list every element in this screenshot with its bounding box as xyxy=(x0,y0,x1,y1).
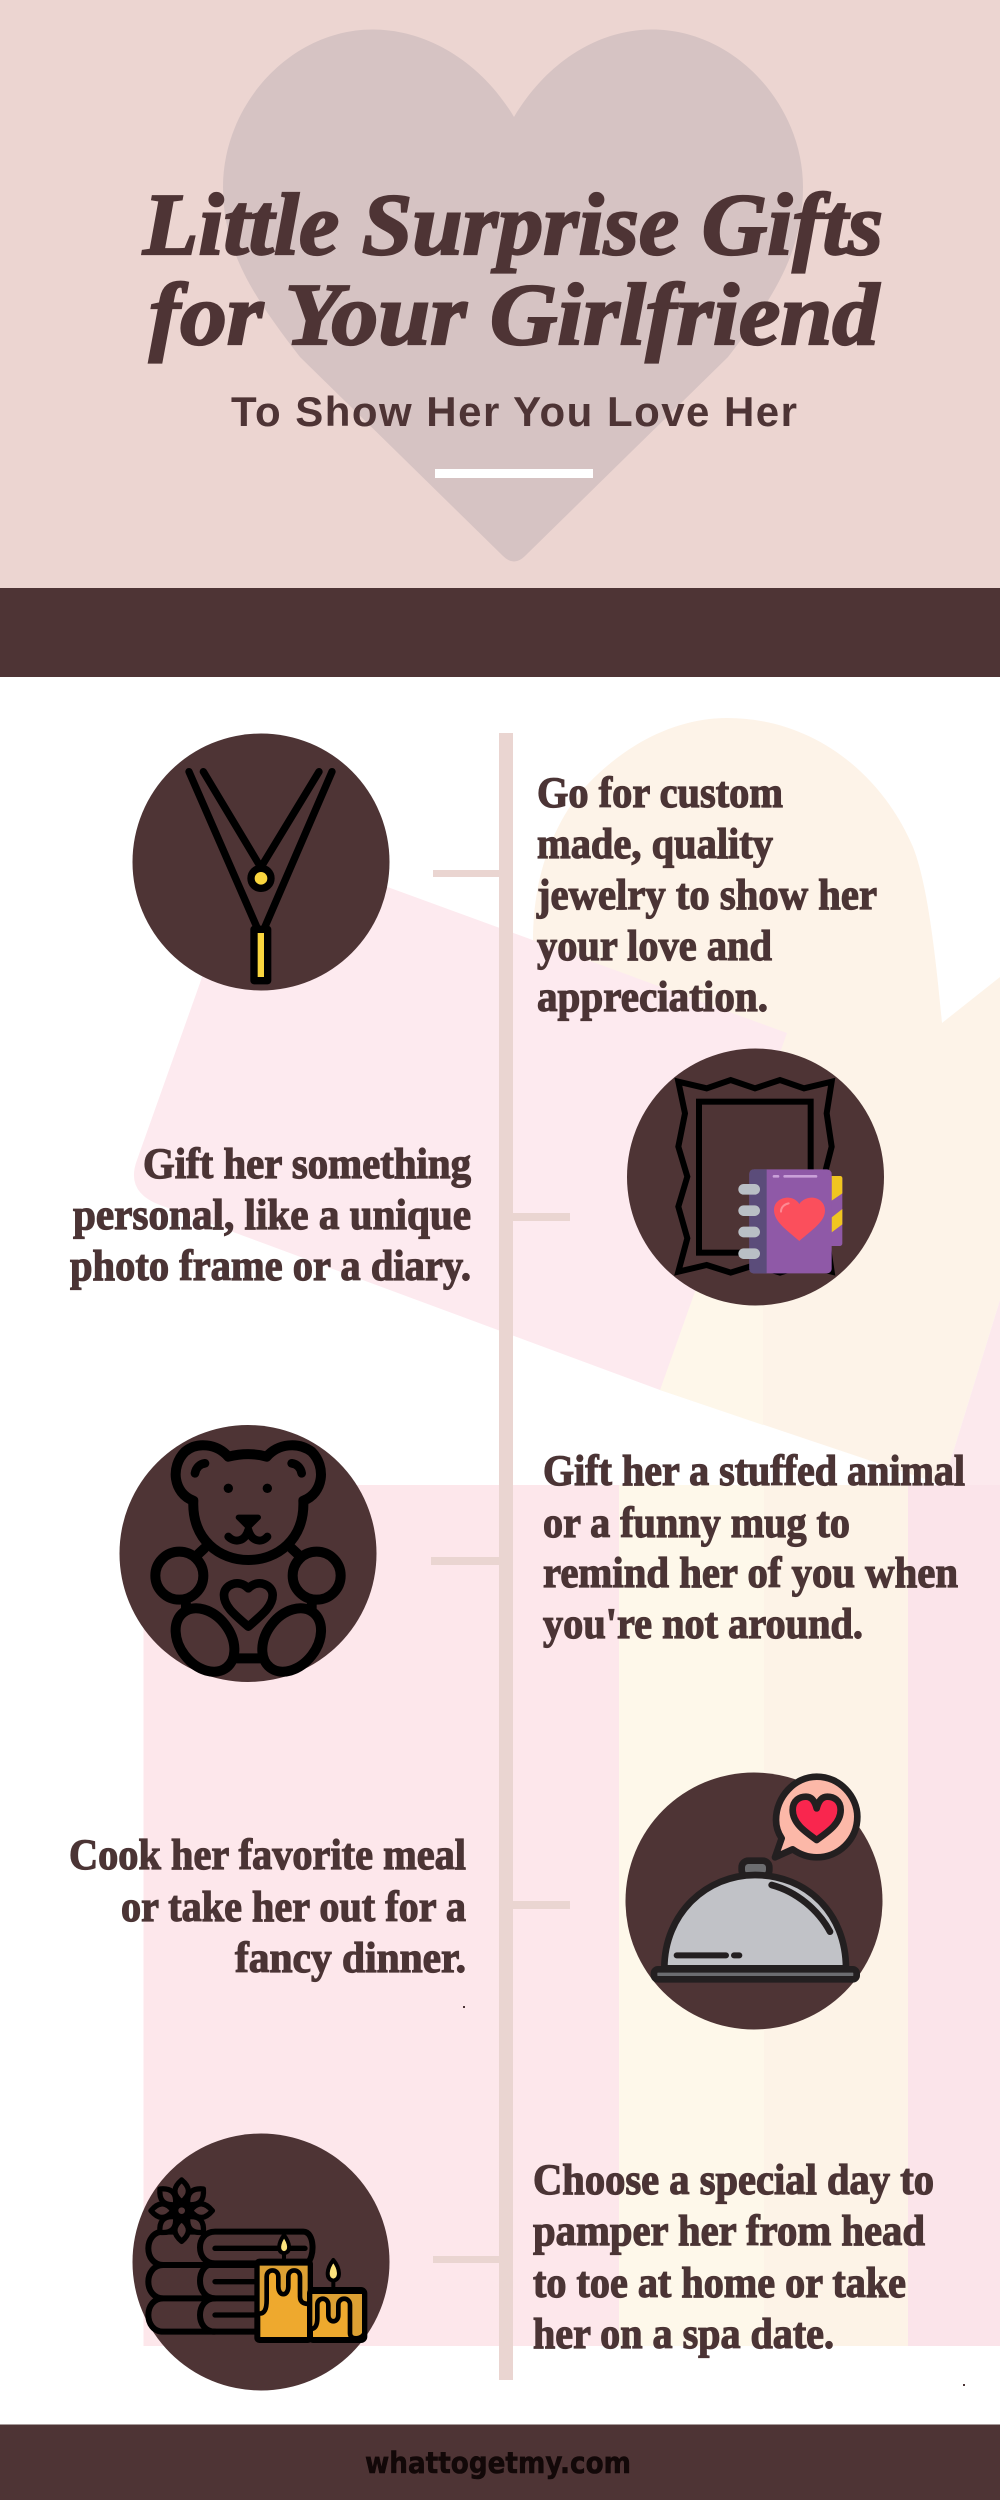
dark banner xyxy=(0,588,1000,677)
header panel xyxy=(0,0,1000,588)
text: jewelry tip: jewelry to show her xyxy=(536,872,877,919)
panel: spa day xyxy=(132,2134,965,2390)
footer website: whattogetmy.com xyxy=(365,2446,631,2480)
text: personal gift tip: personal, like a unique xyxy=(73,1192,471,1239)
title: Little Surprise Gifts xyxy=(142,177,883,274)
footer band xyxy=(0,2424,1000,2500)
text: spa tip: Choose a special day to xyxy=(533,2157,934,2204)
text: jewelry tip: your love and xyxy=(537,923,772,970)
text: spa tip: her on a spa date. xyxy=(533,2311,834,2358)
text: personal gift tip xyxy=(70,1141,471,1290)
panel: photo frame and diary xyxy=(70,1048,884,1306)
title: for Your Girlfriend xyxy=(149,267,881,364)
text: jewelry tip: made, quality xyxy=(537,821,773,868)
text: spa tip: pamper her from head xyxy=(533,2208,925,2255)
text: jewelry tip: Go for custom xyxy=(537,770,783,817)
text: dinner tip: Cook her favorite meal xyxy=(69,1832,466,1879)
text: jewelry tip: appreciation. xyxy=(537,974,768,1021)
panel: stuffed animal xyxy=(120,1425,965,1683)
connector tick xyxy=(513,1901,570,1909)
text: personal gift tip: photo frame or a diary. xyxy=(70,1243,471,1290)
connector tick xyxy=(433,870,499,877)
icon: towels and candles xyxy=(132,2134,390,2390)
icon: large heart xyxy=(223,30,803,562)
panel: jewelry xyxy=(132,734,877,1021)
text: stuffed animal tip xyxy=(543,1448,965,1648)
text: personal gift tip: Gift her something xyxy=(143,1141,471,1188)
panel: dinner xyxy=(69,1772,882,2030)
title xyxy=(142,177,883,364)
text: dinner tip: fancy dinner. xyxy=(235,1935,466,1982)
connector tick xyxy=(433,2256,499,2263)
icon: frame and diary xyxy=(627,1048,884,1306)
text: spa tip xyxy=(533,2157,934,2358)
text: stuffed animal tip: Gift her a stuffed animal xyxy=(543,1448,965,1495)
subtitle: To Show Her You Love Her xyxy=(231,388,797,435)
background pastel shapes xyxy=(134,718,1000,2346)
icon: necklace xyxy=(132,734,390,990)
text: stuffed animal tip: remind her of you when xyxy=(543,1550,958,1597)
text: spa tip: to toe at home or take xyxy=(533,2260,906,2307)
text: stuffed animal tip: you're not around. xyxy=(543,1601,863,1648)
text: dinner tip: or take her out for a xyxy=(121,1884,466,1931)
text: stuffed animal tip: or a funny mug to xyxy=(543,1500,850,1547)
connector tick xyxy=(431,1557,499,1565)
text: dinner tip xyxy=(69,1832,466,1982)
timeline spine xyxy=(499,733,513,2380)
icon: cloche with heart bubble xyxy=(626,1772,882,2030)
white accent bar xyxy=(435,469,593,478)
text: jewelry tip xyxy=(536,770,877,1021)
connector tick xyxy=(513,1213,570,1221)
icon: teddy bear xyxy=(120,1425,376,1683)
